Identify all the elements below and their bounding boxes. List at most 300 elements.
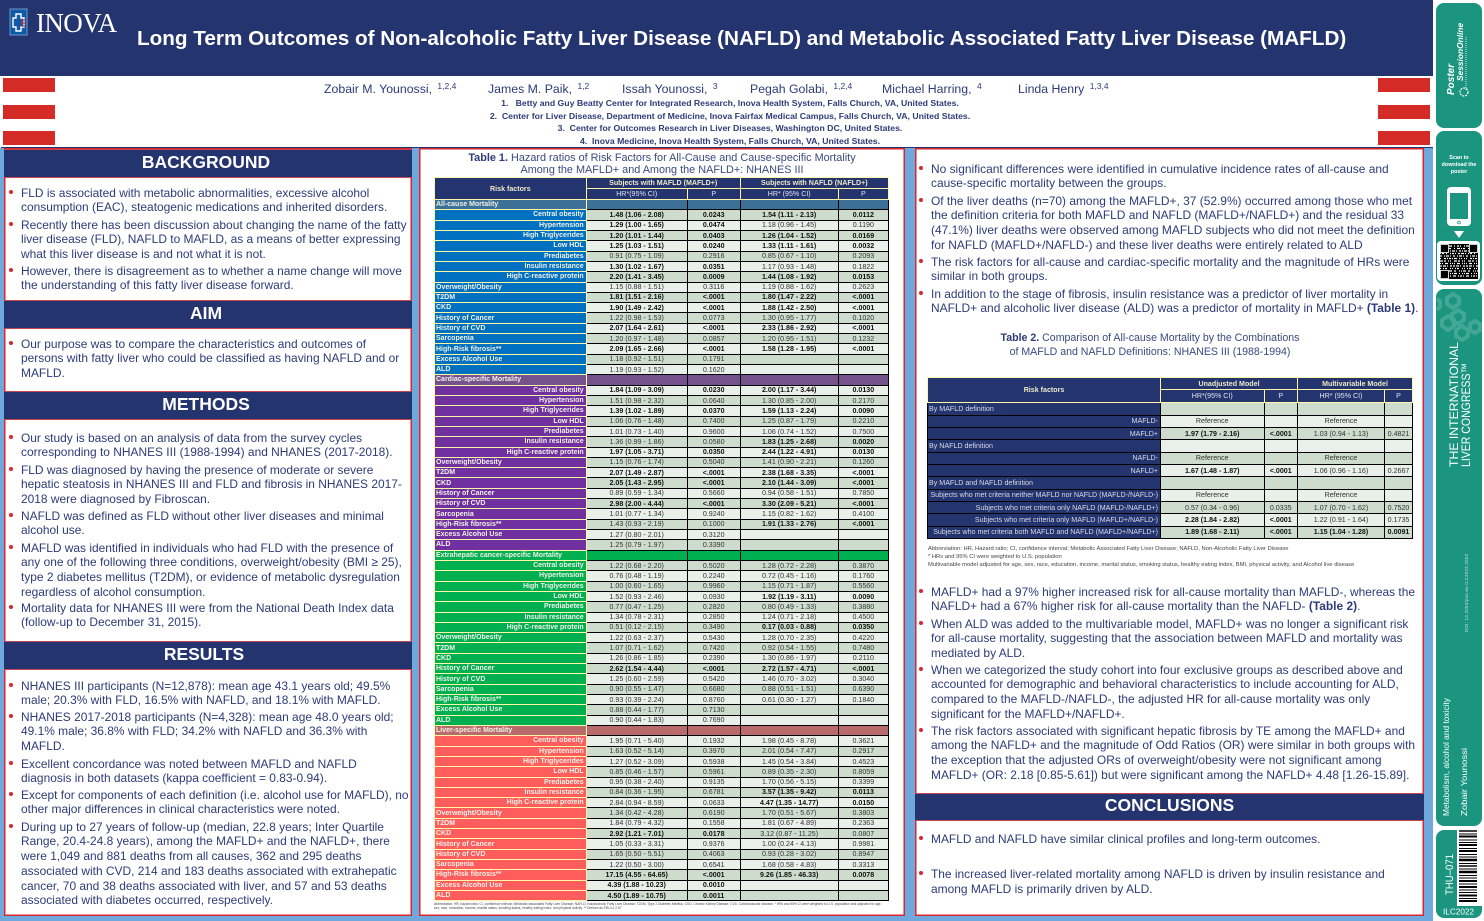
- text: findings bullet: The risk factors for all-cause and cardiac-specific mortality and the magnitude of HRs were: [931, 254, 1409, 268]
- section: liver-specific mortality: 0.0807: [852, 830, 874, 838]
- section: liver-specific mortality: CKD: [436, 830, 451, 837]
- section: extrahepatic cancer-specific mortality: <.0001: [703, 665, 725, 673]
- section: cardiac-specific mortality: 1.91 (1.33 - 2.76): [762, 520, 816, 528]
- text: methods bullet: [21, 462, 402, 507]
- table 2: all-cause mortality by definition: 0.0335: [1270, 504, 1292, 512]
- section: all-cause mortality: High Triglycerides: [523, 232, 584, 239]
- section: liver-specific mortality: 0.3621: [852, 737, 874, 745]
- section: cardiac-specific mortality: CKD: [436, 480, 451, 487]
- section: extrahepatic cancer-specific mortality: 0.1840: [852, 696, 874, 704]
- red bar: [1378, 104, 1430, 118]
- red bar: [1378, 78, 1430, 92]
- table 1: hazard ratios: HR*(95% CI): [616, 190, 657, 198]
- section: all-cause mortality: 0.0857: [703, 335, 725, 343]
- section: extrahepatic cancer-specific mortality: 1.46 (0.70 - 3.02): [762, 675, 816, 683]
- author: Zobair M. Younossi, 1,2,4: [324, 81, 456, 96]
- text: table 2 discussion bullet: the exception that the adjusted ORs of overweight/obesity were not significant among: [931, 753, 1382, 767]
- section: cardiac-specific mortality: 0.3390: [703, 541, 725, 549]
- section: liver-specific mortality: Insulin resistance: [525, 789, 584, 796]
- section: all-cause mortality: High-Risk fibrosis**: [436, 346, 501, 353]
- section: cardiac-specific mortality: 0.94 (0.58 - 1.51): [762, 489, 816, 497]
- table 1: hazard ratios: [434, 177, 889, 901]
- text: table 2 discussion bullet: among the NAFLD+ and the magnitude of Odd Ratios (OR) were similar in both groups with: [931, 738, 1415, 752]
- section: liver-specific mortality: 0.0010: [703, 881, 725, 889]
- section: all-cause mortality: 0.3116: [703, 283, 724, 291]
- text: findings bullet: Of the liver deaths (n=70) among the MAFLD+, 37 (52.9%) occurred among those who met: [931, 194, 1412, 208]
- section: all-cause mortality: 2.09 (1.65 - 2.66): [609, 345, 664, 353]
- text: table 2 discussion bullet: for all-cause mortality, suggesting that the association between MAFLD and mortality was: [931, 631, 1403, 645]
- section: liver-specific mortality: 3.12 (0.87 - 11.25): [760, 830, 818, 838]
- section: liver-specific mortality: 1.34 (0.42 - 4.28): [609, 809, 664, 817]
- section: all-cause mortality: 0.85 (0.67 - 1.10): [762, 252, 816, 260]
- section: all-cause mortality: 1.26 (1.04 - 1.52): [762, 232, 816, 240]
- section: cardiac-specific mortality: 1.06 (0.74 - 1.52): [762, 428, 816, 436]
- text: results bullet: other major differences in clinical characteristics were noted.: [21, 802, 340, 816]
- text: findings bullet: [931, 254, 1409, 284]
- text: table 2 discussion bullet: accounted for demographic and behavioral characteristics to include accounting for ALD,: [931, 677, 1399, 691]
- section: all-cause mortality: 1.81 (1.51 - 2.16): [609, 293, 664, 301]
- section: liver-specific mortality: 0.9135: [703, 778, 725, 786]
- section: extrahepatic cancer-specific mortality: 0.5430: [703, 634, 725, 642]
- section: cardiac-specific mortality: Hypertension: [539, 397, 584, 404]
- section: liver-specific mortality: Sarcopenia: [436, 861, 474, 868]
- section: extrahepatic cancer-specific mortality: 0.17 (0.03 - 0.88): [762, 623, 816, 631]
- author: James M. Paik, 1,2: [488, 81, 589, 96]
- section: extrahepatic cancer-specific mortality: High Triglycerides: [523, 583, 584, 590]
- section: cardiac-specific mortality: High-Risk fibrosis**: [436, 521, 501, 528]
- section: all-cause mortality: High C-reactive protein: [507, 273, 584, 280]
- section: all-cause mortality: ALD: [436, 366, 450, 373]
- section: liver-specific mortality: ALD: [436, 892, 450, 899]
- text: methods bullet: regardless of alcohol consumption.: [21, 585, 205, 599]
- section: all-cause mortality: 0.0032: [852, 242, 874, 250]
- text: results bullet: cancer, 70 and 38 deaths associated with liver, and 57 and 53 deaths: [21, 878, 387, 892]
- table 2: all-cause mortality by definition: 1.06 (0.96 - 1.16): [1314, 467, 1368, 475]
- section: extrahepatic cancer-specific mortality: 0.2240: [703, 572, 725, 580]
- section: all-cause mortality: <.0001: [703, 304, 725, 312]
- section: all-cause mortality: [435, 200, 888, 374]
- section: all-cause mortality: Prediabetes: [544, 253, 584, 260]
- text: table 2 discussion bullet: When ALD was added to the multivariable model, MAFLD+ was no longer a significant risk: [931, 616, 1408, 630]
- text: aim bullet: MAFLD.: [21, 366, 65, 380]
- section: extrahepatic cancer-specific mortality: Sarcopenia: [436, 686, 474, 693]
- section: cardiac-specific mortality: 0.89 (0.59 - 1.34): [609, 489, 664, 497]
- table 2: all-cause mortality by definition: 1.67 (1.48 - 1.87): [1185, 467, 1239, 475]
- section: extrahepatic cancer-specific mortality: High C-reactive protein: [507, 624, 584, 631]
- section: extrahepatic cancer-specific mortality: 2.62 (1.54 - 4.44): [609, 665, 664, 673]
- section: cardiac-specific mortality: 0.0090: [852, 407, 874, 415]
- affiliation: 1. Betty and Guy Beatty Center for Integrated Research, Inova Health System, Falls Church, VA, United States.: [501, 98, 959, 108]
- table 2: all-cause mortality by definition: NAFLD-: [1132, 454, 1158, 462]
- heading: aim: AIM: [190, 303, 222, 323]
- panel: poster session online logo: Poster: [1446, 63, 1457, 95]
- table 2: all-cause mortality by definition: 0.57 (0.34 - 0.96): [1185, 504, 1239, 512]
- section: cardiac-specific mortality: [435, 375, 888, 550]
- section: liver-specific mortality: 0.2363: [852, 819, 874, 827]
- text: methods bullet: corresponding to NHANES III (1988-1994) and NHANES (2017-2018).: [21, 445, 393, 459]
- section: all-cause mortality: 0.0403: [703, 232, 725, 240]
- text: results bullet: diagnosis in both datasets (kappa coefficient = 0.83-0.94).: [21, 771, 327, 785]
- author: Linda Henry 1,3,4: [1018, 81, 1109, 96]
- table 2: all-cause mortality by definition: <.0001: [1270, 430, 1292, 438]
- table 2: all-cause mortality by definition: Subjects who met criteria both MAFLD and NAFLD (MAFLD+/NAFLD+): [933, 528, 1158, 536]
- table 2: all-cause mortality by definition: By NAFLD definition: [929, 442, 993, 450]
- section: all-cause mortality: 0.1190: [853, 221, 874, 229]
- heading: aim: [4, 300, 412, 329]
- section: all-cause mortality: 1.29 (1.00 - 1.65): [609, 221, 664, 229]
- author: Pegah Golabi, 1,2,4: [750, 81, 852, 96]
- text: table 2 discussion bullet: compared to the MAFLD-/NAFLD-, the adjusted HR for all-cause mortality was only: [931, 692, 1370, 706]
- panel: poster session online logo: SessionOnline: [1455, 22, 1465, 81]
- section: liver-specific mortality: Prediabetes: [544, 779, 584, 786]
- table 2: all-cause mortality by definition: Subjects who met criteria only NAFLD (MAFLD-/NAFLD+): [976, 504, 1158, 512]
- section: extrahepatic cancer-specific mortality: 0.4220: [852, 634, 874, 642]
- section: extrahepatic cancer-specific mortality: 0.88 (0.44 - 1.77): [609, 706, 664, 714]
- section: cardiac-specific mortality: Prediabetes: [544, 428, 584, 435]
- section: cardiac-specific mortality: 0.9600: [703, 428, 725, 436]
- footnote: table 1: Abbreviation: HR, hazard ratio; CI, confidence interval; Metabolic associated Fatty Liver Disease; NAFLD, Nonalcoholic Fatty Liver Disease; T2DM, Type 2 Diabetes Mellitus; CKD, Chronic Kidney Disease; CVD, Cardiovascular disease. * HRs and 95% CI were weighted to U.S. population and adjusted for age,: [434, 902, 881, 906]
- section: extrahepatic cancer-specific mortality: 0.6390: [852, 685, 874, 693]
- section: extrahepatic cancer-specific mortality: 0.7130: [703, 706, 725, 714]
- section: cardiac-specific mortality: 0.0130: [852, 448, 874, 456]
- table 2: all-cause mortality by definition: Multivariable Model: [1322, 380, 1388, 388]
- section: liver-specific mortality: 1.27 (0.52 - 3.09): [609, 758, 664, 766]
- section: extrahepatic cancer-specific mortality: 0.90 (0.55 - 1.47): [609, 685, 664, 693]
- panel: scan to download: download the: [1442, 162, 1476, 168]
- section: all-cause mortality: History of CVD: [436, 325, 485, 332]
- section: extrahepatic cancer-specific mortality: 0.5420: [703, 675, 725, 683]
- text: results bullet: MAFLD.: [21, 739, 65, 753]
- affiliation: 4. Inova Medicine, Inova Health System, Falls Church, VA, United States.: [580, 136, 880, 146]
- section: cardiac-specific mortality: <.0001: [703, 469, 725, 477]
- section: extrahepatic cancer-specific mortality: 0.5020: [703, 562, 725, 570]
- section: extrahepatic cancer-specific mortality: 0.7480: [852, 644, 874, 652]
- section: extrahepatic cancer-specific mortality: 0.3870: [852, 562, 874, 570]
- table 2: all-cause mortality by definition: NAFLD+: [1131, 467, 1158, 475]
- table 1: hazard ratios: HR* (95% CI): [768, 190, 811, 198]
- section: cardiac-specific mortality: 1.06 (0.76 - 1.48): [609, 417, 664, 425]
- section: liver-specific mortality: History of Cancer: [436, 841, 494, 848]
- section: all-cause mortality: 0.1020: [852, 314, 874, 322]
- section: extrahepatic cancer-specific mortality: Central obesity: [533, 562, 584, 569]
- section: liver-specific mortality: 1.81 (0.67 - 4.89): [762, 819, 816, 827]
- section: cardiac-specific mortality: 0.1000: [703, 520, 725, 528]
- section: cardiac-specific mortality: 1.30 (0.85 - 2.00): [762, 397, 816, 405]
- section: extrahepatic cancer-specific mortality: 1.22 (0.63 - 2.37): [609, 634, 664, 642]
- section: cardiac-specific mortality: <.0001: [852, 500, 874, 508]
- section: extrahepatic cancer-specific mortality: History of Cancer: [436, 665, 494, 672]
- section: extrahepatic cancer-specific mortality: 1.92 (1.19 - 3.11): [762, 593, 816, 601]
- section: all-cause mortality: 0.0112: [853, 211, 874, 219]
- table 2: all-cause mortality by definition: Risk factors: [1024, 386, 1064, 394]
- table 2: all-cause mortality by definition: P: [1396, 392, 1401, 400]
- section: liver-specific mortality: 1.22 (0.50 - 3.00): [609, 861, 664, 869]
- text: aim bullet: [21, 336, 399, 381]
- text: background bullet: what this liver disease is and not what it is not.: [21, 247, 266, 261]
- red bar: [3, 78, 55, 92]
- section: cardiac-specific mortality: Insulin resistance: [525, 438, 584, 445]
- red bar: [3, 131, 55, 145]
- section: liver-specific mortality: 1.98 (0.45 - 8.78): [762, 737, 816, 745]
- heading: methods: METHODS: [162, 394, 250, 414]
- section: liver-specific mortality: High-Risk fibrosis**: [436, 871, 501, 878]
- panel: the international liver congress: Metabolism, alcohol and toxicity: [1442, 698, 1451, 816]
- section: liver-specific mortality: 2.84 (0.94 - 8.59): [609, 799, 664, 807]
- text: background bullet: However, there is disagreement as to whether a name change will move: [21, 264, 402, 278]
- section: all-cause mortality: 0.0240: [703, 242, 725, 250]
- text: background bullet: consumption (EAC), steatogenic medications and inherited disorders.: [21, 200, 387, 214]
- text: results bullet: [21, 756, 357, 786]
- panel: poster id and barcode: THU–071: [1444, 854, 1456, 895]
- section: extrahepatic cancer-specific mortality: 0.88 (0.51 - 1.51): [762, 685, 816, 693]
- section: all-cause mortality: Overweight/Obesity: [436, 284, 502, 291]
- section: extrahepatic cancer-specific mortality: Extrahepatic cancer-specific Mortality: [436, 552, 562, 559]
- table 2: all-cause mortality by definition: <.0001: [1270, 528, 1292, 536]
- text: background bullet: liver disease (FLD), NAFLD to MAFLD, as a means of better expressing: [21, 232, 400, 246]
- section: liver-specific mortality: 0.3970: [703, 747, 725, 755]
- text: results bullet: Excellent concordance was noted between MAFLD and NAFLD: [21, 756, 357, 770]
- section: liver-specific mortality: 0.93 (0.28 - 3.02): [762, 850, 816, 858]
- section: extrahepatic cancer-specific mortality: 0.1760: [852, 572, 874, 580]
- section: all-cause mortality: 1.20 (1.01 - 1.44): [609, 232, 664, 240]
- heading: conclusions: CONCLUSIONS: [1105, 795, 1234, 815]
- section: liver-specific mortality: High Triglycerides: [523, 758, 584, 765]
- section: cardiac-specific mortality: 1.25 (0.87 - 1.79): [762, 417, 816, 425]
- footnote: table 1: sex, race, education, income, marital status, smoking status, healthy eating index, and physical activity. ** Defined as FIB-4 ≥ 2.67: [434, 906, 622, 910]
- section: liver-specific mortality: 0.0633: [703, 799, 725, 807]
- table 2: all-cause mortality by definition: P: [1278, 392, 1283, 400]
- section: cardiac-specific mortality: 0.5040: [703, 458, 725, 466]
- authors and affiliations: [1, 76, 1433, 148]
- section: all-cause mortality: 0.2623: [852, 283, 874, 291]
- text: results bullet: [21, 710, 394, 754]
- section: all-cause mortality: 1.48 (1.06 - 2.08): [609, 211, 664, 219]
- section: cardiac-specific mortality: 0.4100: [852, 510, 874, 518]
- section: cardiac-specific mortality: Sarcopenia: [436, 511, 474, 518]
- section: liver-specific mortality: 1.95 (0.71 - 5.40): [609, 737, 664, 745]
- text: methods bullet: any one of the following three conditions, overweight/obesity (BMI ≥ 25),: [21, 555, 402, 569]
- section: all-cause mortality: 1.18 (0.96 - 1.45): [762, 221, 816, 229]
- text: results bullet: 49.1% male; 36.8% with FLD; 34.2% with NAFLD and 36.3% with: [21, 724, 367, 738]
- panel: right column: [915, 148, 1424, 916]
- red bar: [1378, 131, 1430, 145]
- section: extrahepatic cancer-specific mortality: 0.92 (0.54 - 1.55): [762, 644, 816, 652]
- text: table 2 discussion bullet: [931, 584, 1415, 614]
- text: aim bullet: persons with fatty liver who could be classified as having NAFLD and or: [21, 351, 399, 365]
- section: extrahepatic cancer-specific mortality: 1.07 (0.71 - 1.62): [609, 644, 664, 652]
- panel: the international liver congress: Zobair Younossi: [1460, 748, 1469, 816]
- section: cardiac-specific mortality: 2.10 (1.44 - 3.09): [762, 479, 816, 487]
- section: extrahepatic cancer-specific mortality: 0.3040: [852, 675, 874, 683]
- text: findings bullet: similar in both groups.: [931, 269, 1048, 283]
- section: all-cause mortality: 0.2916: [703, 252, 725, 260]
- section: extrahepatic cancer-specific mortality: 0.77 (0.47 - 1.25): [609, 603, 664, 611]
- section: liver-specific mortality: 1.70 (0.51 - 5.67): [762, 809, 816, 817]
- section: cardiac-specific mortality: 1.15 (0.82 - 1.62): [762, 510, 816, 518]
- section: extrahepatic cancer-specific mortality: 0.2390: [703, 654, 725, 662]
- section: cardiac-specific mortality: 1.01 (0.73 - 1.40): [609, 428, 664, 436]
- section: all-cause mortality: CKD: [436, 304, 451, 311]
- section: extrahepatic cancer-specific mortality: 0.72 (0.45 - 1.16): [762, 572, 816, 580]
- section: all-cause mortality: 1.15 (0.88 - 1.51): [609, 283, 664, 291]
- section: extrahepatic cancer-specific mortality: 1.30 (0.86 - 1.97): [762, 654, 816, 662]
- table 1: hazard ratios: Risk factors: [490, 184, 531, 192]
- section: all-cause mortality: 1.30 (1.02 - 1.67): [609, 263, 664, 271]
- footnote: table 2: * HRs and 95% CI were weighted to U.S. population: [928, 554, 1062, 560]
- text: methods bullet: type 2 diabetes mellitus (T2DM), or evidence of metabolic dysregulation: [21, 570, 400, 584]
- section: all-cause mortality: 0.0009: [703, 273, 725, 281]
- text: table 2 discussion bullet: MAFLD+ (OR: 2.18 [0.85-5.61]) but were significant among the NAFLD+ 4.48 [1.26-15.89].: [931, 768, 1409, 782]
- section: liver-specific mortality: 17.15 (4.55 - 64.65): [606, 871, 668, 879]
- text: table 2 discussion bullet: [931, 616, 1408, 661]
- section: liver-specific mortality: 1.00 (0.24 - 4.13): [762, 840, 816, 848]
- section: liver-specific mortality: 2.92 (1.21 - 7.01): [609, 830, 664, 838]
- text: results bullet: [21, 678, 390, 708]
- section: liver-specific mortality: 1.70 (0.56 - 5.15): [762, 778, 816, 786]
- section: all-cause mortality: 1.80 (1.47 - 2.22): [762, 293, 816, 301]
- section: cardiac-specific mortality: 1.43 (0.93 - 2.19): [609, 520, 664, 528]
- text: methods bullet: (follow-up to December 31, 2015).: [21, 615, 201, 629]
- text: background bullet: [21, 218, 407, 262]
- text: findings bullet: the definition criteria for both MAFLD and NAFLD (MAFLD+/NAFLD+) and the residual 33: [931, 208, 1404, 222]
- section: extrahepatic cancer-specific mortality: 0.0350: [852, 623, 874, 631]
- table 2: all-cause mortality by definition: MAFLD-: [1132, 417, 1158, 425]
- table 2: all-cause mortality by definition: Reference: [1196, 417, 1229, 425]
- text: results bullet: male; 20.3% with FLD, 16.5% with NAFLD, and 18.1% with MAFLD.: [21, 693, 381, 707]
- panel: poster session online logo: [1436, 3, 1482, 128]
- section: all-cause mortality: 0.2093: [852, 252, 874, 260]
- table 2: all-cause mortality by definition: 0.4821: [1388, 430, 1409, 438]
- text: methods bullet: [21, 430, 393, 460]
- section: extrahepatic cancer-specific mortality: 0.0090: [852, 593, 874, 601]
- section: all-cause mortality: <.0001: [852, 293, 874, 301]
- section: liver-specific mortality: 0.2917: [852, 747, 874, 755]
- table 2: all-cause mortality by definition: By MAFLD definition: [929, 405, 994, 413]
- section: cardiac-specific mortality: 0.0020: [852, 438, 874, 446]
- text: methods bullet: FLD was diagnosed by having the presence of moderate or severe: [21, 462, 373, 476]
- table 2: all-cause mortality by definition: 1.15 (1.04 - 1.28): [1314, 528, 1368, 536]
- table 2: all-cause mortality by definition: Subjects who met criteria neither MAFLD nor NAFLD (MAFLD-/NAFLD-): [930, 491, 1158, 499]
- text: findings bullet: [931, 286, 1418, 316]
- section: extrahepatic cancer-specific mortality: T2DM: [436, 645, 455, 652]
- section: liver-specific mortality: 0.3803: [852, 809, 874, 817]
- section: liver-specific mortality: 0.84 (0.36 - 1.95): [609, 788, 664, 796]
- section: liver-specific mortality: 0.8059: [852, 768, 874, 776]
- panel: poster id and barcode: ILC2022: [1443, 906, 1474, 916]
- section: extrahepatic cancer-specific mortality: [435, 551, 888, 725]
- section: cardiac-specific mortality: History of CVD: [436, 500, 485, 507]
- panel: the international liver congress: DOI: 10.3252/pso.eu.ILC2022.2022: [1464, 553, 1469, 632]
- heading: background: [4, 149, 412, 178]
- section: cardiac-specific mortality: 0.0640: [703, 397, 725, 405]
- section: liver-specific mortality: 0.9376: [703, 840, 725, 848]
- section: liver-specific mortality: 0.95 (0.38 - 2.40): [609, 778, 664, 786]
- text: table 2 discussion bullet: [931, 724, 1415, 782]
- text: aim bullet: Our purpose was to compare the characteristics and outcomes of: [21, 336, 366, 350]
- text: table 2 discussion bullet: significant for the MAFLD+/NAFLD+.: [931, 707, 1125, 721]
- section: all-cause mortality: History of Cancer: [436, 315, 494, 322]
- text: findings bullet: No significant differences were identified in cumulative incidence rates of all-cause and: [931, 162, 1389, 176]
- text: table 2 discussion bullet: NAFLD+ had a 67% higher risk for all-cause mortality than the NAFLD- (Table 2).: [931, 599, 1360, 613]
- text: table 2 discussion bullet: [931, 662, 1403, 722]
- section: cardiac-specific mortality: 0.0350: [703, 448, 725, 456]
- section: liver-specific mortality: 3.57 (1.35 - 9.42): [762, 788, 816, 796]
- section: all-cause mortality: <.0001: [703, 293, 725, 301]
- table 2: all-cause mortality by definition: By MAFLD and NAFLD definition: [929, 479, 1033, 487]
- text: findings bullet: In addition to the stage of fibrosis, insulin resistance was a predictor of liver mortality in: [931, 286, 1388, 300]
- section: liver-specific mortality: 0.4523: [852, 758, 874, 766]
- text: findings bullet: for NAFLD (MAFLD+/NAFLD-) and these liver deaths were entirely related to ALD: [931, 238, 1363, 252]
- text: background bullet: [21, 186, 387, 215]
- section: extrahepatic cancer-specific mortality: 1.00 (0.60 - 1.65): [609, 582, 664, 590]
- text: results bullet: [21, 820, 397, 908]
- section: extrahepatic cancer-specific mortality: ALD: [436, 717, 450, 724]
- section: all-cause mortality: 0.0153: [852, 273, 874, 281]
- section: all-cause mortality: 0.1791: [703, 355, 725, 363]
- panel: scan to download: Scan to: [1449, 155, 1469, 161]
- text: findings bullet: cause-specific mortality between the groups.: [931, 176, 1167, 190]
- section: all-cause mortality: Hypertension: [539, 222, 584, 229]
- section: extrahepatic cancer-specific mortality: Insulin resistance: [525, 614, 584, 621]
- heading: results: [4, 640, 412, 670]
- section: all-cause mortality: 0.0243: [703, 211, 725, 219]
- section: cardiac-specific mortality: 0.7400: [703, 417, 725, 425]
- text: results bullet: NHANES III participants (N=12,878): mean age 43.1 years old; 49.5%: [21, 678, 390, 692]
- section: extrahepatic cancer-specific mortality: 0.7690: [703, 716, 725, 724]
- text: findings bullet: [931, 162, 1389, 191]
- section: all-cause mortality: 1.20 (0.95 - 1.51): [762, 335, 816, 343]
- section: cardiac-specific mortality: 1.59 (1.13 - 2.24): [762, 407, 816, 415]
- footnote: table 2: Abbreviation: HR, Hazard ratio; CI, confidence interval; Metabolic Associated Fatty Liver Disease; NAFLD, Non-Alcoholic Fatty Liver Disease: [928, 546, 1289, 552]
- heading: results: RESULTS: [164, 644, 244, 664]
- section: cardiac-specific mortality: 3.30 (2.09 - 5.21): [762, 500, 816, 508]
- section: liver-specific mortality: <.0001: [703, 871, 725, 879]
- heading: methods: [4, 391, 412, 420]
- section: liver-specific mortality: 0.0011: [703, 892, 724, 900]
- panel: left column: [4, 148, 412, 916]
- section: all-cause mortality: 0.0773: [703, 314, 725, 322]
- table 2: all-cause mortality by definition: Reference: [1196, 491, 1229, 499]
- section: extrahepatic cancer-specific mortality: 0.93 (0.39 - 2.24): [609, 696, 664, 704]
- section: cardiac-specific mortality: 0.9240: [703, 510, 725, 518]
- section: all-cause mortality: 1.30 (0.95 - 1.77): [762, 314, 816, 322]
- section: all-cause mortality: T2DM: [436, 294, 455, 301]
- section: all-cause mortality: 1.20 (0.97 - 1.48): [609, 335, 664, 343]
- section: extrahepatic cancer-specific mortality: Low HDL: [553, 593, 584, 600]
- text: table 2 discussion bullet: When we categorized the study cohort into four exclusive groups as described above and: [931, 662, 1403, 676]
- section: all-cause mortality: 0.91 (0.75 - 1.09): [609, 252, 664, 260]
- section: extrahepatic cancer-specific mortality: 0.76 (0.48 - 1.19): [609, 572, 664, 580]
- table 2: all-cause mortality by definition: <.0001: [1270, 516, 1292, 524]
- section: cardiac-specific mortality: 1.84 (1.09 - 3.09): [609, 386, 664, 394]
- section: extrahepatic cancer-specific mortality: 0.3490: [703, 623, 725, 631]
- section: extrahepatic cancer-specific mortality: 1.22 (0.68 - 2.20): [609, 562, 664, 570]
- text: methods bullet: Mortality data for NHANES III were from the National Death Index data: [21, 600, 394, 614]
- text: conclusion bullet: MAFLD and NAFLD have similar clinical profiles and long-term outcomes.: [931, 832, 1320, 846]
- logo: Inova: INOVA: [36, 8, 118, 38]
- table 2: all-cause mortality by definition: MAFLD+: [1130, 430, 1158, 438]
- section: all-cause mortality: 1.58 (1.28 - 1.95): [762, 345, 816, 353]
- table 2: all-cause mortality by definition: [927, 377, 1413, 539]
- section: cardiac-specific mortality: 0.0580: [703, 438, 725, 446]
- text: methods bullet: [21, 508, 384, 538]
- section: cardiac-specific mortality: Low HDL: [553, 418, 584, 425]
- text: results bullet: Range, 20.4-24.8 years), among the MAFLD+ and the NAFLD+, there: [21, 834, 390, 848]
- text: methods bullet: hepatic steatosis in NHANES III and FLD and fibrosis in NHANES 2017-: [21, 477, 402, 491]
- section: cardiac-specific mortality: 2.44 (1.22 - 4.91): [762, 448, 816, 456]
- section: extrahepatic cancer-specific mortality: 1.24 (0.71 - 2.18): [762, 613, 816, 621]
- section: liver-specific mortality: 0.3399: [852, 778, 874, 786]
